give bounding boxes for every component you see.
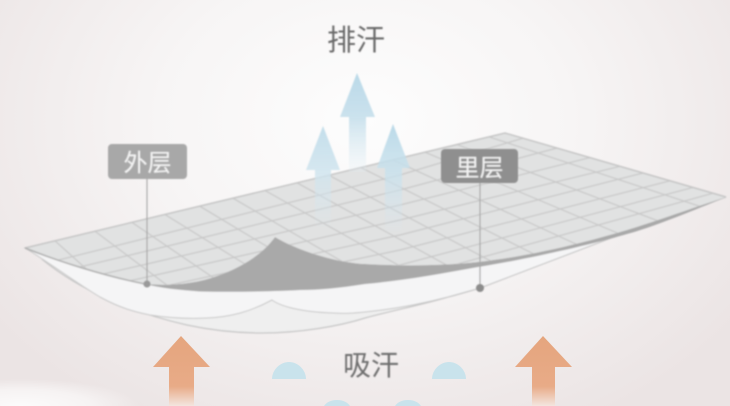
- dark inner layer: [145, 197, 726, 292]
- heading: sweat absorption: 吸汗: [343, 350, 399, 381]
- callout: outer layer: [108, 144, 187, 288]
- arrow: centre blue: [340, 73, 375, 172]
- top sheet with grid: [24, 132, 726, 285]
- lower layer: [43, 197, 726, 333]
- arrow: left orange: [153, 336, 210, 406]
- arrow: right orange: [515, 336, 572, 406]
- water droplets: [272, 362, 466, 406]
- arrow: right blue: [377, 124, 410, 234]
- upper white layer: [25, 197, 726, 318]
- arrow: left blue: [306, 126, 340, 228]
- fabric sheet: [24, 132, 726, 334]
- callout: outer layer: 外层: [124, 150, 172, 177]
- callout: inner layer: 里层: [456, 155, 504, 182]
- sweat-out arrows: [306, 73, 410, 234]
- heading: sweat out: 排汗: [327, 24, 385, 57]
- callout: inner layer: [441, 149, 518, 292]
